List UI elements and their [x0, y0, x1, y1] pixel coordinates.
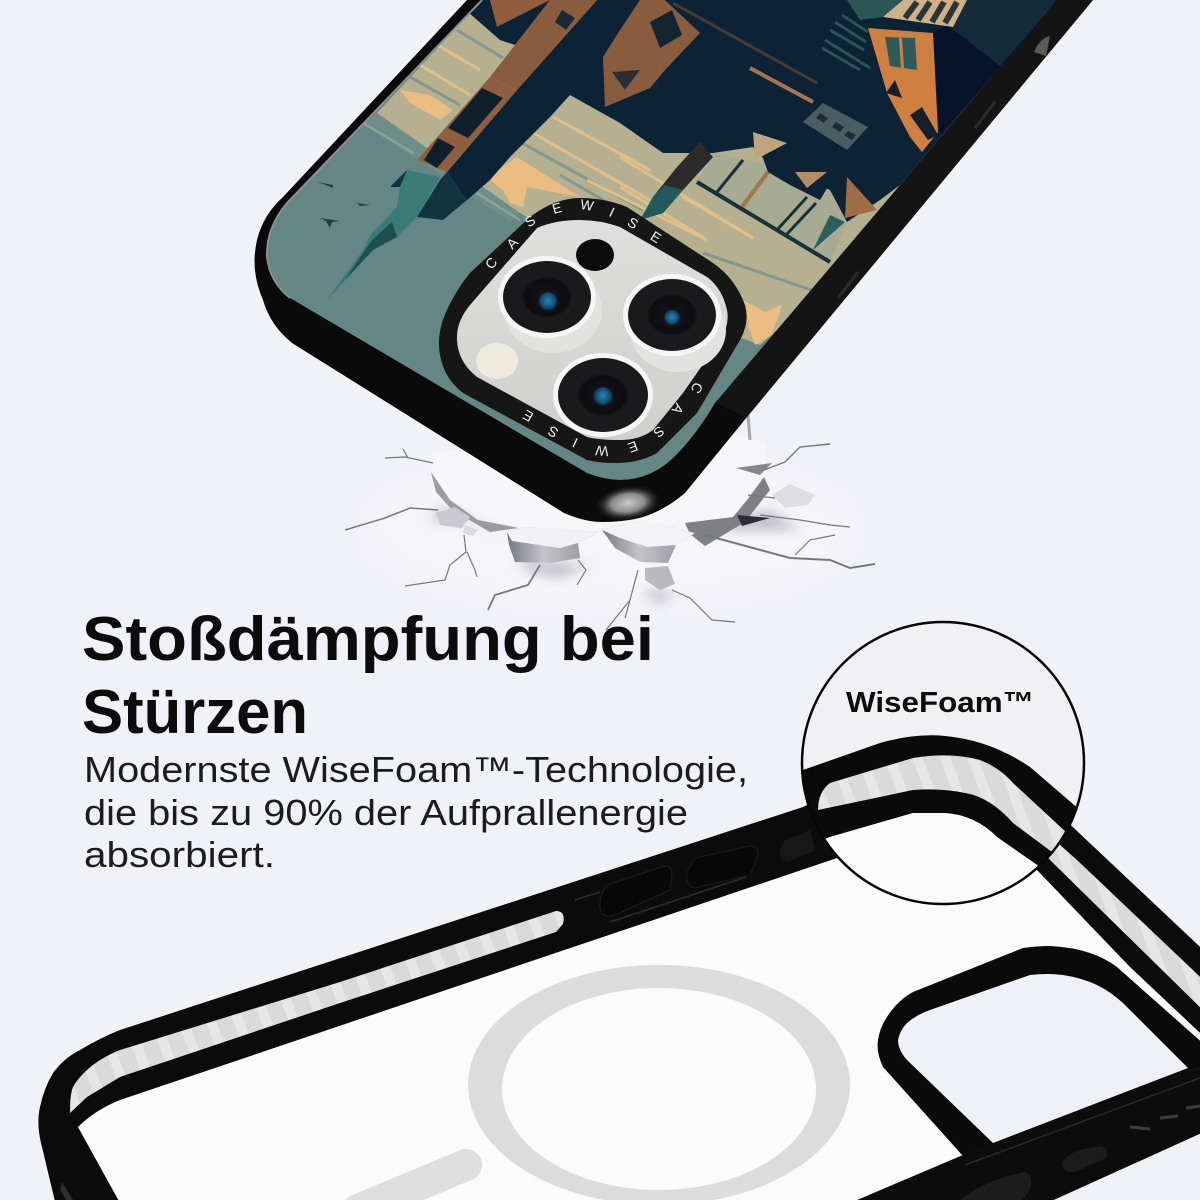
top beam: [673, 3, 817, 83]
magnetic ring alignment nub: [358, 1165, 466, 1200]
clear back interior: [78, 857, 1200, 1200]
debris small rocks: [436, 507, 470, 528]
chevron roofs: [753, 132, 787, 160]
CASEWISE ring text: S: [522, 212, 538, 230]
camera island: [439, 196, 747, 463]
case right band shade: [715, 0, 1093, 417]
magnifier circle: [800, 620, 1086, 906]
top left dark patch: [468, 0, 550, 45]
magnifier outline: [802, 622, 1084, 904]
brown beam: [750, 68, 813, 102]
CASEWISE ring text: E: [550, 199, 564, 217]
dark city mass: [447, 0, 1070, 222]
teal wall stripes: [822, 15, 870, 70]
clouds: [400, 90, 782, 345]
cream window block: [883, 0, 967, 27]
CASEWISE ring text: E: [520, 407, 536, 425]
case body: [255, 0, 1093, 522]
CASEWISE ring text: S: [625, 214, 641, 232]
groove lines: [575, 877, 746, 922]
magnified interior: [770, 813, 1100, 930]
left plate: [431, 440, 600, 524]
crater light glow: [370, 460, 850, 600]
flash: [476, 343, 518, 379]
right foam strip: [1040, 836, 1200, 1022]
upper phone in black case: [250, 0, 1093, 526]
heading: Stürzen: [82, 678, 308, 747]
body text: die bis zu 90% der Aufprallenergie: [84, 792, 688, 833]
orange building: [868, 28, 938, 152]
outer black bumper: [38, 770, 1200, 1200]
magnifier label: WiseFoam™: [846, 687, 1034, 719]
microphone hole: [576, 239, 614, 271]
button three: [780, 830, 815, 862]
CASEWISE ring text: S: [545, 423, 561, 441]
left foam strip: [70, 911, 564, 1113]
lower right bumper: [850, 1062, 1200, 1200]
sky upper teal band: [363, 113, 520, 222]
CASEWISE ring text: I: [570, 435, 580, 451]
teal wall: [847, 0, 903, 20]
crack lines: [345, 415, 875, 630]
heading: [82, 605, 654, 747]
right plate: [650, 430, 767, 523]
CASEWISE ring text: W: [579, 196, 596, 214]
teal sky: [250, 0, 1070, 500]
button one: [600, 866, 672, 916]
CASEWISE ring text: A: [668, 401, 687, 418]
tan water area: [377, 0, 1000, 345]
water grey-teal stripes: [410, 30, 820, 293]
CASEWISE ring text: A: [503, 234, 521, 252]
camera window frame: [878, 946, 1200, 1156]
debris left lower: [507, 527, 599, 563]
pier columns: [717, 160, 816, 234]
body text: absorbiert.: [84, 834, 275, 875]
centre ornament: [603, 0, 700, 107]
case gloss highlight: [592, 480, 664, 526]
left port: [60, 1182, 73, 1200]
magnifier background: [802, 622, 1084, 904]
CASEWISE ring text: C: [482, 254, 500, 272]
darker right quarter: [933, 0, 1060, 135]
water peach stripes: [420, 45, 753, 240]
spire three: [813, 215, 845, 250]
birds: [317, 182, 370, 228]
brown tower top: [490, 0, 597, 90]
bumper highlight line: [965, 1078, 1200, 1165]
green spire left shadow: [417, 172, 467, 220]
lower case frame: [38, 770, 1200, 1200]
lens three: [553, 353, 653, 437]
green spire right: [640, 142, 713, 220]
speaker streaks: [1130, 1106, 1200, 1129]
body text: Modernste WiseFoam™-Technologie,: [84, 749, 748, 790]
camera window opening: [898, 974, 1188, 1143]
grey windows block: [803, 103, 868, 150]
magnified black band: [803, 735, 1076, 866]
case artwork: [250, 0, 1070, 500]
railing: [697, 182, 830, 262]
brown gable: [490, 0, 550, 27]
CASEWISE ring text: C: [688, 380, 706, 396]
side buttons: [1034, 36, 1050, 56]
tower window: [555, 10, 575, 30]
crater with cracks: [345, 415, 875, 630]
green spire left: [327, 170, 440, 300]
magnetic ring: [468, 965, 850, 1200]
magnified frame: [803, 735, 1076, 902]
camera bumper ring: [439, 198, 747, 463]
CASEWISE ring text: W: [594, 442, 609, 460]
CASEWISE ring text: E: [626, 438, 640, 456]
button two: [687, 846, 758, 888]
metal camera plate: [457, 220, 728, 440]
tower column frame: [417, 77, 517, 172]
debris centre: [602, 520, 695, 563]
glass bevel edge: [267, 0, 482, 298]
body text: [84, 749, 748, 875]
CASEWISE ring text: [482, 196, 706, 460]
lens two: [623, 274, 721, 356]
pier haze: [697, 153, 847, 262]
CASEWISE ring text: S: [650, 423, 668, 441]
crater shadows: [430, 508, 800, 604]
magnified foam: [818, 755, 1080, 858]
bottom ports: [1062, 1146, 1107, 1172]
CASEWISE ring text: E: [648, 228, 664, 246]
sky light streaks: [363, 123, 520, 220]
lens housings: [504, 267, 726, 372]
heading: Stoßdämpfung bei: [82, 605, 654, 674]
charge port: [960, 1172, 1031, 1200]
side buttons: [575, 830, 815, 922]
CASEWISE ring text: I: [607, 204, 617, 220]
lens one: [498, 256, 596, 338]
dark hanging roofs: [762, 157, 827, 200]
far right wall: [950, 0, 1058, 66]
tower column windows: [424, 88, 503, 168]
